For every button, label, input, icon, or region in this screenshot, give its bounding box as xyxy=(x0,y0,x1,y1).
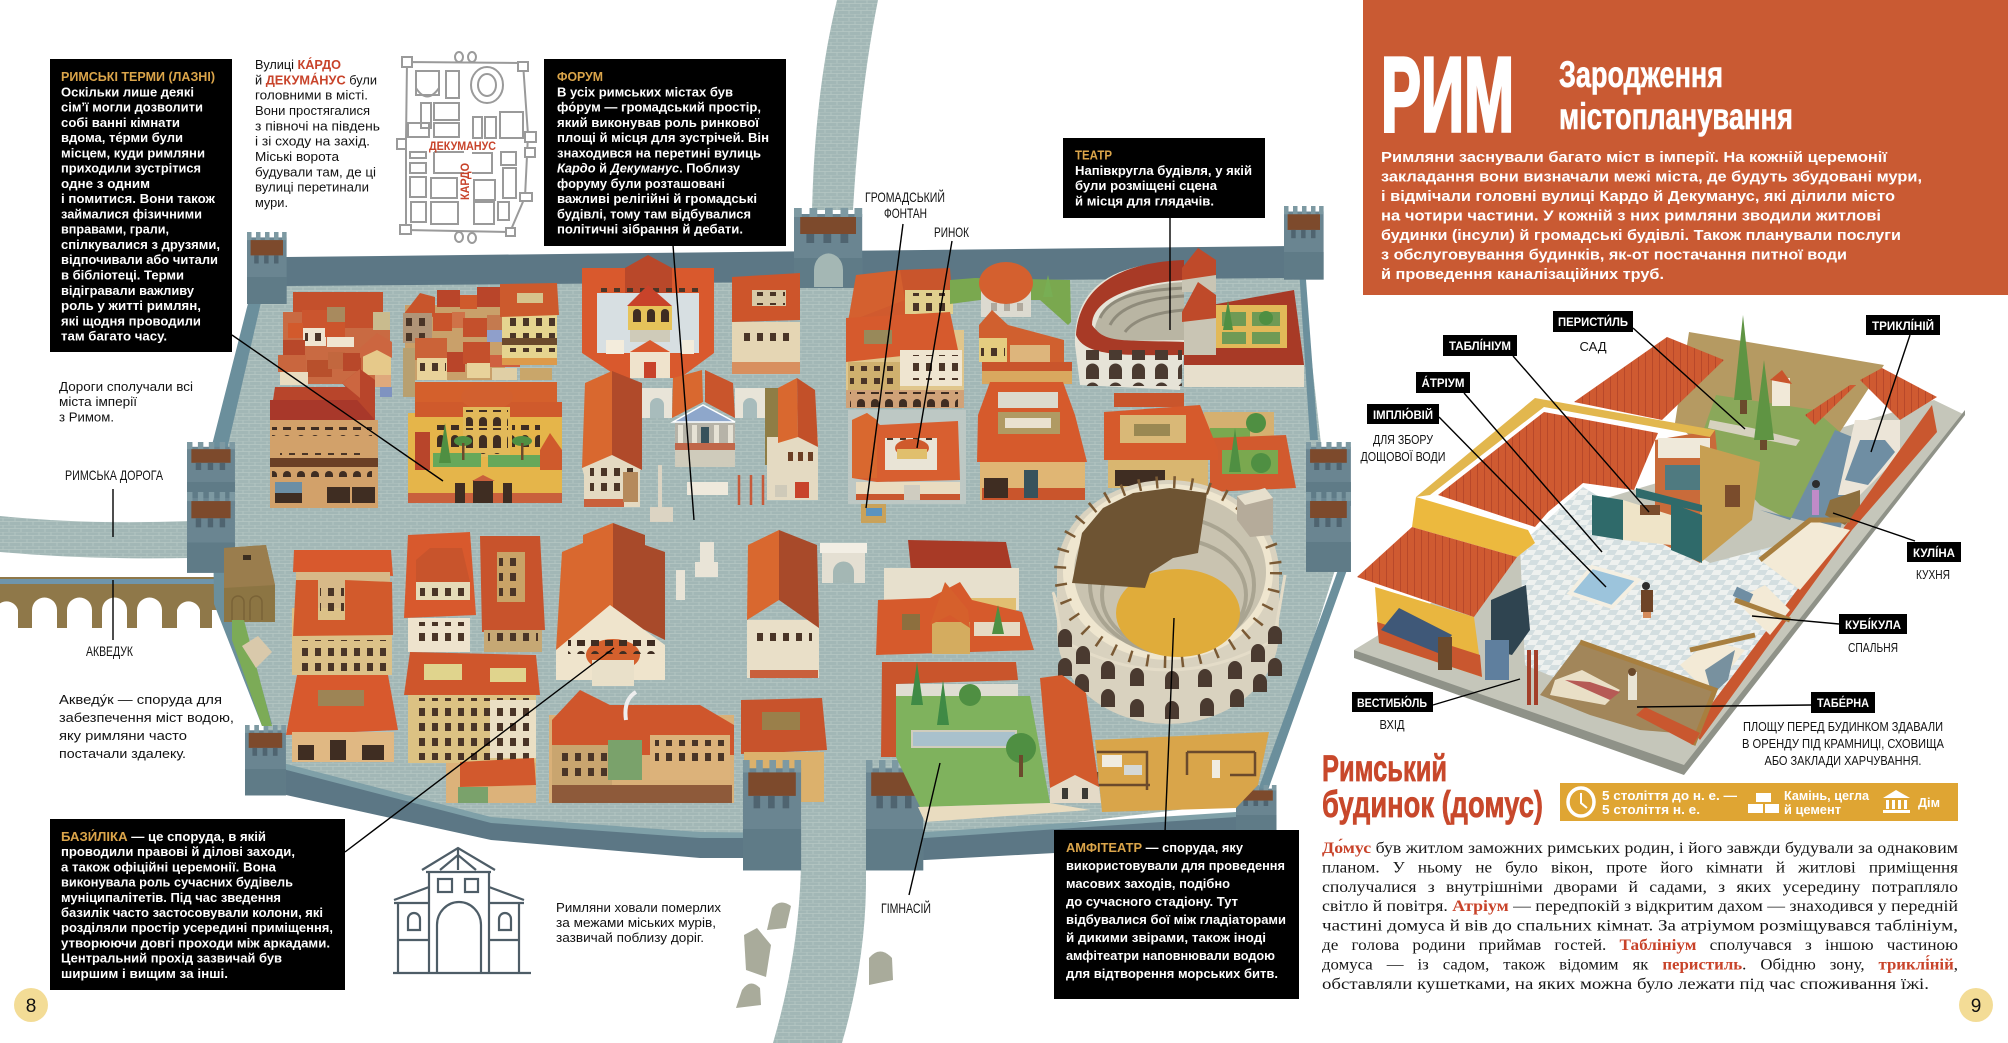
material text xyxy=(1784,788,1870,817)
cubicula xyxy=(1680,520,1850,695)
label: vestibule: ВЕСТИБЮ́ЛЬ xyxy=(1357,695,1427,710)
callout: amphitheatre: масових заходів, подібно xyxy=(1066,877,1230,891)
person in peristyle xyxy=(1812,480,1820,515)
forum statues xyxy=(676,542,718,600)
aqueduct xyxy=(0,577,226,628)
label: tablinum: ТАБЛІ́НІУМ xyxy=(1449,338,1511,353)
callout: forum: ФОРУМ xyxy=(557,70,603,84)
south wall top edge east xyxy=(866,812,1236,838)
vestibule column xyxy=(1527,650,1538,705)
callout: basilica: Центральний прохід зазвичай був xyxy=(61,952,282,966)
intro paragraph: будинки (інсули) й громадські будівлі. Також планували послуги xyxy=(1381,227,1901,244)
gravestones xyxy=(736,902,893,1008)
body text: domus xyxy=(1322,840,1958,993)
text: Cardo and Decumanus: з півночі на південь xyxy=(255,119,380,133)
tablinum xyxy=(1592,430,1760,563)
text: aqueduct explained: забезпечення міст водою, xyxy=(59,711,234,725)
body text: domus: планом. У ньому не було вікон, проте його кімнати й житлові приміщення xyxy=(1322,859,1958,876)
insula N xyxy=(403,283,559,397)
label: culina: КУЛІ́НА xyxy=(1913,545,1955,560)
houses SW 4 xyxy=(480,536,545,652)
houses S 6 xyxy=(549,690,734,803)
peristyle blue walk xyxy=(1760,430,1860,530)
aqueduct water tower xyxy=(224,545,275,622)
central temple xyxy=(642,370,765,467)
tower top-center gate xyxy=(794,208,862,288)
impluvium xyxy=(1570,567,1638,607)
leader: theatre xyxy=(1169,218,1171,330)
leader: aqueduct xyxy=(112,580,114,640)
callout: basilica: базилік часто застосовували колони, які xyxy=(61,906,323,920)
text: aqueduct explained: постачали здалеку. xyxy=(59,747,186,761)
callout: forum: В усіх римських містах був xyxy=(557,85,733,99)
label: vestibule xyxy=(1352,692,1433,712)
text: roads: Дороги сполучали всі xyxy=(59,380,193,394)
SE palace xyxy=(876,540,1034,655)
callout: Roman baths xyxy=(50,59,232,352)
callout: Roman baths: спілкувалися з друзями, xyxy=(61,238,220,252)
leader: roman road xyxy=(112,489,114,537)
callout: forum: знаходився на перетині вулиць xyxy=(557,146,761,160)
house and garden E xyxy=(1104,393,1296,492)
plan label: decumanus: ДЕКУМАНУС xyxy=(429,139,496,153)
heading: Roman house: будинок (домус) xyxy=(1322,784,1543,825)
forum E building N xyxy=(732,273,800,374)
amphitheatre xyxy=(1053,480,1285,724)
callout: basilica xyxy=(50,819,345,990)
heading: Roman house: Римський xyxy=(1322,748,1447,789)
caption: entrance: ВХІД xyxy=(1380,717,1405,732)
body text: domus: домуса — із садом, також відомим як перистиль . Обідню зону, триклі́ній , xyxy=(1322,956,1958,973)
body text: domus: сполучалися з внутрішніми дворами й садами, з яких усередину потрапляло xyxy=(1322,879,1958,896)
house S 7 xyxy=(741,698,827,802)
page number 9: 9 xyxy=(1971,996,1981,1017)
garden path xyxy=(1708,420,1800,446)
tower south-east xyxy=(1236,785,1276,833)
gym long hall xyxy=(1040,675,1101,803)
callout: amphitheatre: до сучасного стадіону. Тут xyxy=(1066,895,1238,909)
person in atrium xyxy=(1641,582,1653,618)
callout: Roman baths: собі ванні кімнати xyxy=(61,116,180,130)
callout: Roman baths: Оскільки лише деякі xyxy=(61,85,194,99)
banner: Rome heading xyxy=(1363,0,2008,295)
text: Cardo and Decumanus xyxy=(255,57,380,210)
towers west xyxy=(187,442,235,573)
leader: basilica xyxy=(345,648,614,852)
callout: forum: Кардо й Декуманус. Поблизу xyxy=(557,162,740,176)
text: burials: Римляни ховали померлих xyxy=(556,901,722,915)
text: Cardo and Decumanus: і зі сходу на захід. xyxy=(255,135,370,149)
leader: fountain xyxy=(866,224,903,508)
intro paragraph: Римляни заснували багато міст в імперії. На кожній церемонії xyxy=(1381,149,1888,166)
label: peristyle: ПЕРИСТИ́ЛЬ xyxy=(1558,314,1628,329)
callout: amphitheatre xyxy=(1054,830,1299,999)
text: burials xyxy=(556,901,722,945)
callout: theatre: й місця для глядачів. xyxy=(1075,194,1214,208)
callout: Roman baths: сім’ї могли дозволити xyxy=(61,101,203,115)
callout: Roman baths: які щодня проводили xyxy=(61,314,201,328)
west wall xyxy=(212,272,272,726)
label: taberna xyxy=(1811,692,1875,713)
label: gymnasium: ГІМНАСІЙ xyxy=(881,899,931,916)
building type text: Дім xyxy=(1918,795,1940,810)
intro paragraph: на чотири частини. У кожній з них римляни зводили житлові xyxy=(1381,208,1881,224)
city map xyxy=(187,206,1351,870)
callout: amphitheatre: використовували для проведення xyxy=(1066,859,1285,873)
icon: temple xyxy=(1883,790,1910,813)
leader: gymnasium xyxy=(909,763,940,895)
material text: Камінь, цегла xyxy=(1784,788,1870,803)
atrium floor xyxy=(1520,487,1847,735)
leader: culina xyxy=(1833,513,1915,541)
market xyxy=(848,410,966,504)
slab xyxy=(1354,400,1965,772)
callout: Roman baths: відігравали важливу xyxy=(61,284,194,298)
caption: rain water xyxy=(1360,432,1446,464)
leader: cubicula xyxy=(1752,616,1839,624)
mini plan of the city xyxy=(397,52,536,243)
callout: basilica: утворюючи довгі проходи між аркадами. xyxy=(61,936,330,950)
leader: vestibule xyxy=(1433,679,1520,705)
houses SW 3 xyxy=(404,532,476,652)
gymnasium xyxy=(881,662,1090,822)
text: aqueduct explained: Акведу́к — споруда для xyxy=(59,693,222,707)
leader: peristyle xyxy=(1633,328,1745,429)
intro paragraph: закладання вони визначали межі міста, де будуть збудовані мури, xyxy=(1381,168,1922,186)
callout: forum: важливі релігійні й громадські xyxy=(557,192,757,206)
peristyle roof right xyxy=(1805,368,1937,425)
text: roads: міста імперії xyxy=(59,395,138,409)
text: Cardo and Decumanus: вулиці перетинали xyxy=(255,181,369,195)
label: atrium: А́ТРІУМ xyxy=(1422,375,1465,390)
callout: amphitheatre: амфітеатри наповнювали водою xyxy=(1066,949,1275,963)
text: Cardo and Decumanus: Вулиці КА́РДО xyxy=(255,57,341,72)
triclinium xyxy=(1838,420,1900,495)
houses mid north xyxy=(979,310,1064,362)
text: Cardo and Decumanus: Міські ворота xyxy=(255,150,339,164)
subheading: Зародження xyxy=(1559,54,1723,95)
west garden xyxy=(232,620,272,726)
subheading: містопланування xyxy=(1559,96,1793,137)
body text: domus: частині домуса й вів до спальних кімнат. За атріумом розміщувався таблініум, xyxy=(1322,918,1958,935)
basilica map building xyxy=(556,523,665,686)
callout: forum: фо́рум — громадський простір, xyxy=(557,101,761,115)
icon: basilica outline xyxy=(393,848,531,973)
callout: basilica: муніципалітетів. Під час зведення xyxy=(61,891,281,905)
period text xyxy=(1602,788,1737,817)
heading: Rome: РИМ xyxy=(1381,36,1514,154)
label: aqueduct: АКВЕДУК xyxy=(86,643,134,659)
callout: Roman baths: займалися фізичними xyxy=(61,207,202,221)
callout: amphitheatre: й дикими звірами, також іноді xyxy=(1066,931,1266,945)
taberna xyxy=(1540,642,1715,745)
page number 9 xyxy=(1959,988,1993,1022)
icon: bricks xyxy=(1748,793,1779,813)
front building with roof xyxy=(1357,527,1530,680)
garden back walls xyxy=(1675,332,1884,495)
south wall west part xyxy=(279,765,801,858)
insula block market N xyxy=(846,268,964,408)
forum W building xyxy=(582,371,642,507)
callout: theatre: були розміщені сцена xyxy=(1075,179,1218,193)
east wall lower xyxy=(1258,570,1347,790)
text: burials: за межами міських мурів, xyxy=(556,916,716,930)
arch xyxy=(820,543,867,583)
text: Cardo and Decumanus: Вони простягалися xyxy=(255,104,370,118)
callout: Roman baths: РИМСЬКІ ТЕРМИ (ЛАЗНІ) xyxy=(61,70,215,84)
insula cluster NW xyxy=(278,292,392,397)
intro paragraph: й проведення каналізаційних труб. xyxy=(1381,266,1664,283)
text: aqueduct explained: яку римляни часто xyxy=(59,729,187,743)
callout: forum xyxy=(544,59,786,246)
label: culina xyxy=(1907,542,1961,562)
tower top-left xyxy=(247,232,287,304)
label: market: РИНОК xyxy=(934,224,970,240)
leader: amphitheatre xyxy=(1165,618,1174,832)
callout: forum: будівлі, тому там відбувалися xyxy=(557,207,751,221)
caption: rain water: ДОЩОВОЇ ВОДИ xyxy=(1360,449,1446,464)
label: atrium xyxy=(1416,372,1470,393)
peristyle roof left xyxy=(1574,337,1724,420)
text: Cardo and Decumanus: головними в місті. xyxy=(255,89,368,103)
public fountain xyxy=(861,504,886,523)
houses S 5 xyxy=(404,652,540,803)
forum temple complex xyxy=(582,255,714,378)
callout: forum: форуму були розташовані xyxy=(557,177,725,191)
callout: forum: площі й місця для зустрічей. Він xyxy=(557,131,769,145)
callout: basilica: БАЗИ́ЛІКА — це споруда, в якій xyxy=(61,829,266,844)
south road xyxy=(773,830,866,1043)
text: aqueduct explained xyxy=(59,693,234,761)
intro paragraph: з обслуговування будинків, як-от постачання питної води xyxy=(1381,246,1847,264)
callout: Roman baths: вправами, грали, xyxy=(61,223,169,237)
subheading xyxy=(1559,54,1793,137)
insula tan W xyxy=(270,369,378,508)
callout: theatre: ТЕАТР xyxy=(1075,148,1112,162)
tholos with lawn xyxy=(950,262,1071,325)
info bar xyxy=(1560,783,1958,821)
atrium roof with yellow rim xyxy=(1412,398,1715,557)
body text: domus: До́мус був житлом заможних римських родин, і його завжди будували за однаковим xyxy=(1322,840,1958,857)
red columns xyxy=(739,475,763,505)
label: cubicula xyxy=(1839,614,1907,634)
plan label: cardo: КАРДО xyxy=(458,163,472,200)
label: public fountain xyxy=(865,188,945,221)
heading: Roman house xyxy=(1322,748,1543,825)
leader: atrium xyxy=(1464,393,1602,552)
callout: Roman baths: приходили зустрітися xyxy=(61,162,201,176)
label: cubicula: КУБІ́КУЛА xyxy=(1845,617,1901,632)
amphitheatre stair tower xyxy=(1237,488,1273,537)
callout: Roman baths: і помитися. Вони також xyxy=(61,192,216,206)
text: Cardo and Decumanus: й ДЕКУМА́НУС були xyxy=(255,72,377,87)
city top wall xyxy=(286,246,1290,286)
garden lawn xyxy=(1700,395,1840,520)
gate towers south xyxy=(743,760,923,870)
icon: clock xyxy=(1568,788,1594,816)
text: roads xyxy=(59,380,193,424)
leader: forum xyxy=(673,245,694,520)
caption: garden: САД xyxy=(1579,339,1607,354)
intro paragraph xyxy=(1381,149,1922,283)
caption: taberna note: АБО ЗАКЛАДИ ХАРЧУВАННЯ. xyxy=(1764,753,1922,768)
callout: Roman baths: роль у житті римлян, xyxy=(61,299,201,313)
label: triclinium xyxy=(1866,315,1940,335)
slab edge xyxy=(1354,410,1965,775)
callout: theatre: Напівкругла будівля, у якій xyxy=(1075,164,1252,178)
leader: taberna xyxy=(1637,705,1811,707)
amphitheatre awning xyxy=(1072,488,1207,588)
caption: taberna note: ПЛОЩУ ПЕРЕД БУДИНКОМ ЗДАВАЛИ xyxy=(1743,719,1943,734)
callout: Roman baths: там багато часу. xyxy=(61,330,167,344)
leader: impluvium xyxy=(1439,417,1606,587)
city ground xyxy=(218,255,1335,840)
text: Cardo and Decumanus: мури. xyxy=(255,196,288,210)
text: roads: з Римом. xyxy=(59,410,114,424)
material text: й цемент xyxy=(1784,802,1841,817)
callout: amphitheatre: для відтворення морських битв. xyxy=(1066,967,1278,981)
label: peristyle xyxy=(1553,311,1633,332)
period text: 5 століття н. е. xyxy=(1602,802,1700,817)
leader: tablinum xyxy=(1513,356,1649,512)
body text: domus: обставляли кушетками, на яких можна було лежати під час споживання їжі. xyxy=(1322,976,1929,993)
east wall xyxy=(1298,253,1318,440)
leader: market xyxy=(917,241,952,448)
callout: forum: який виконував роль ринкової xyxy=(557,116,759,130)
towers east xyxy=(1306,442,1351,572)
caption: taberna note: В ОРЕНДУ ПІД КРАМНИЦІ, СХОВИЩА xyxy=(1742,736,1944,751)
label: public fountain: ГРОМАДСЬКИЙ xyxy=(865,188,945,205)
leader: triclinium xyxy=(1871,335,1910,452)
caption: taberna note xyxy=(1742,719,1944,768)
callout: amphitheatre: відбувалися бої між гладіаторами xyxy=(1066,913,1286,927)
animal yard xyxy=(1095,732,1269,812)
callout: Roman baths: в бібліотеці. Терми xyxy=(61,268,184,282)
forum E building S xyxy=(765,378,818,500)
amphitheatre arches xyxy=(1058,626,1282,719)
label: Roman road: РИМСЬКА ДОРОГА xyxy=(65,467,163,483)
page number 8 xyxy=(14,988,48,1022)
callout: basilica: а також офіційні церемонії. Вона xyxy=(61,860,277,874)
building beside forum road xyxy=(747,530,819,678)
Roman road west xyxy=(0,516,190,558)
intro paragraph: і відмічали головні вулиці Кардо й Декуманус, які ділили місто xyxy=(1381,188,1895,205)
callout: Roman baths: місцем, куди римляни xyxy=(61,146,205,160)
callout: basilica: ширшим і вищим за інші. xyxy=(61,967,228,981)
period text: 5 століття до н. е. — xyxy=(1602,788,1737,803)
north road xyxy=(812,0,878,210)
callout: amphitheatre: АМФІТЕАТР — споруда, яку xyxy=(1066,841,1243,855)
leader: thermae xyxy=(232,335,443,481)
thermae xyxy=(408,382,562,503)
label: impluvium xyxy=(1367,404,1439,424)
caption: kitchen: КУХНЯ xyxy=(1916,567,1950,582)
theatre xyxy=(1075,260,1184,390)
house illustration xyxy=(1354,315,1965,775)
altar xyxy=(687,482,728,495)
body text: domus: світло й повітря. Атріум — передпокій з відкритим дахом — знаходився у передній xyxy=(1322,898,1958,915)
callout: basilica: проводили правові й ділові заходи, xyxy=(61,845,295,859)
south wall top edge xyxy=(279,762,801,838)
south wall east part xyxy=(866,815,1240,860)
callout: Roman baths: відпочивали або читали xyxy=(61,253,218,267)
tower top-right xyxy=(1284,206,1324,280)
body text: domus: де голова родини приймав гостей. Таблініум сполучався з іншою частиною xyxy=(1322,937,1958,954)
houses SW 1 xyxy=(292,550,393,675)
callout: theatre xyxy=(1063,138,1265,218)
theatre side building and garden xyxy=(1182,248,1304,387)
shrine xyxy=(1770,370,1792,406)
caption: bedroom: СПАЛЬНЯ xyxy=(1848,640,1898,655)
callout: forum: політичні зібрання й дебати. xyxy=(557,223,743,237)
callout: basilica: виконувала роль сучасних будівель xyxy=(61,876,293,890)
large house centre-east xyxy=(977,362,1087,500)
right wall red xyxy=(1692,405,1937,740)
callout: Roman baths: одне з одним xyxy=(61,177,150,191)
callout: basilica: розділяли простір усередині приміщення, xyxy=(61,921,333,935)
label: triclinium: ТРИКЛІ́НІЙ xyxy=(1872,318,1934,333)
label: impluvium: ІМПЛЮ́ВІЙ xyxy=(1373,407,1433,422)
houses SW 2 xyxy=(286,675,398,762)
page number 8: 8 xyxy=(26,996,36,1017)
label: tablinum xyxy=(1443,335,1517,356)
callout: Roman baths: вдома, те́рми були xyxy=(61,131,183,145)
text: burials: зазвичай поблизу доріг. xyxy=(556,931,704,945)
text: Cardo and Decumanus: будували там, де ці xyxy=(255,165,376,179)
cypress trees xyxy=(1734,315,1774,450)
kitchen xyxy=(1825,490,1860,525)
tower south-west xyxy=(245,725,286,795)
label: taberna: ТАБЕ́РНА xyxy=(1817,695,1869,710)
label: public fountain: ФОНТАН xyxy=(884,205,927,221)
obelisk xyxy=(650,465,673,522)
caption: rain water: ДЛЯ ЗБОРУ xyxy=(1373,432,1434,447)
